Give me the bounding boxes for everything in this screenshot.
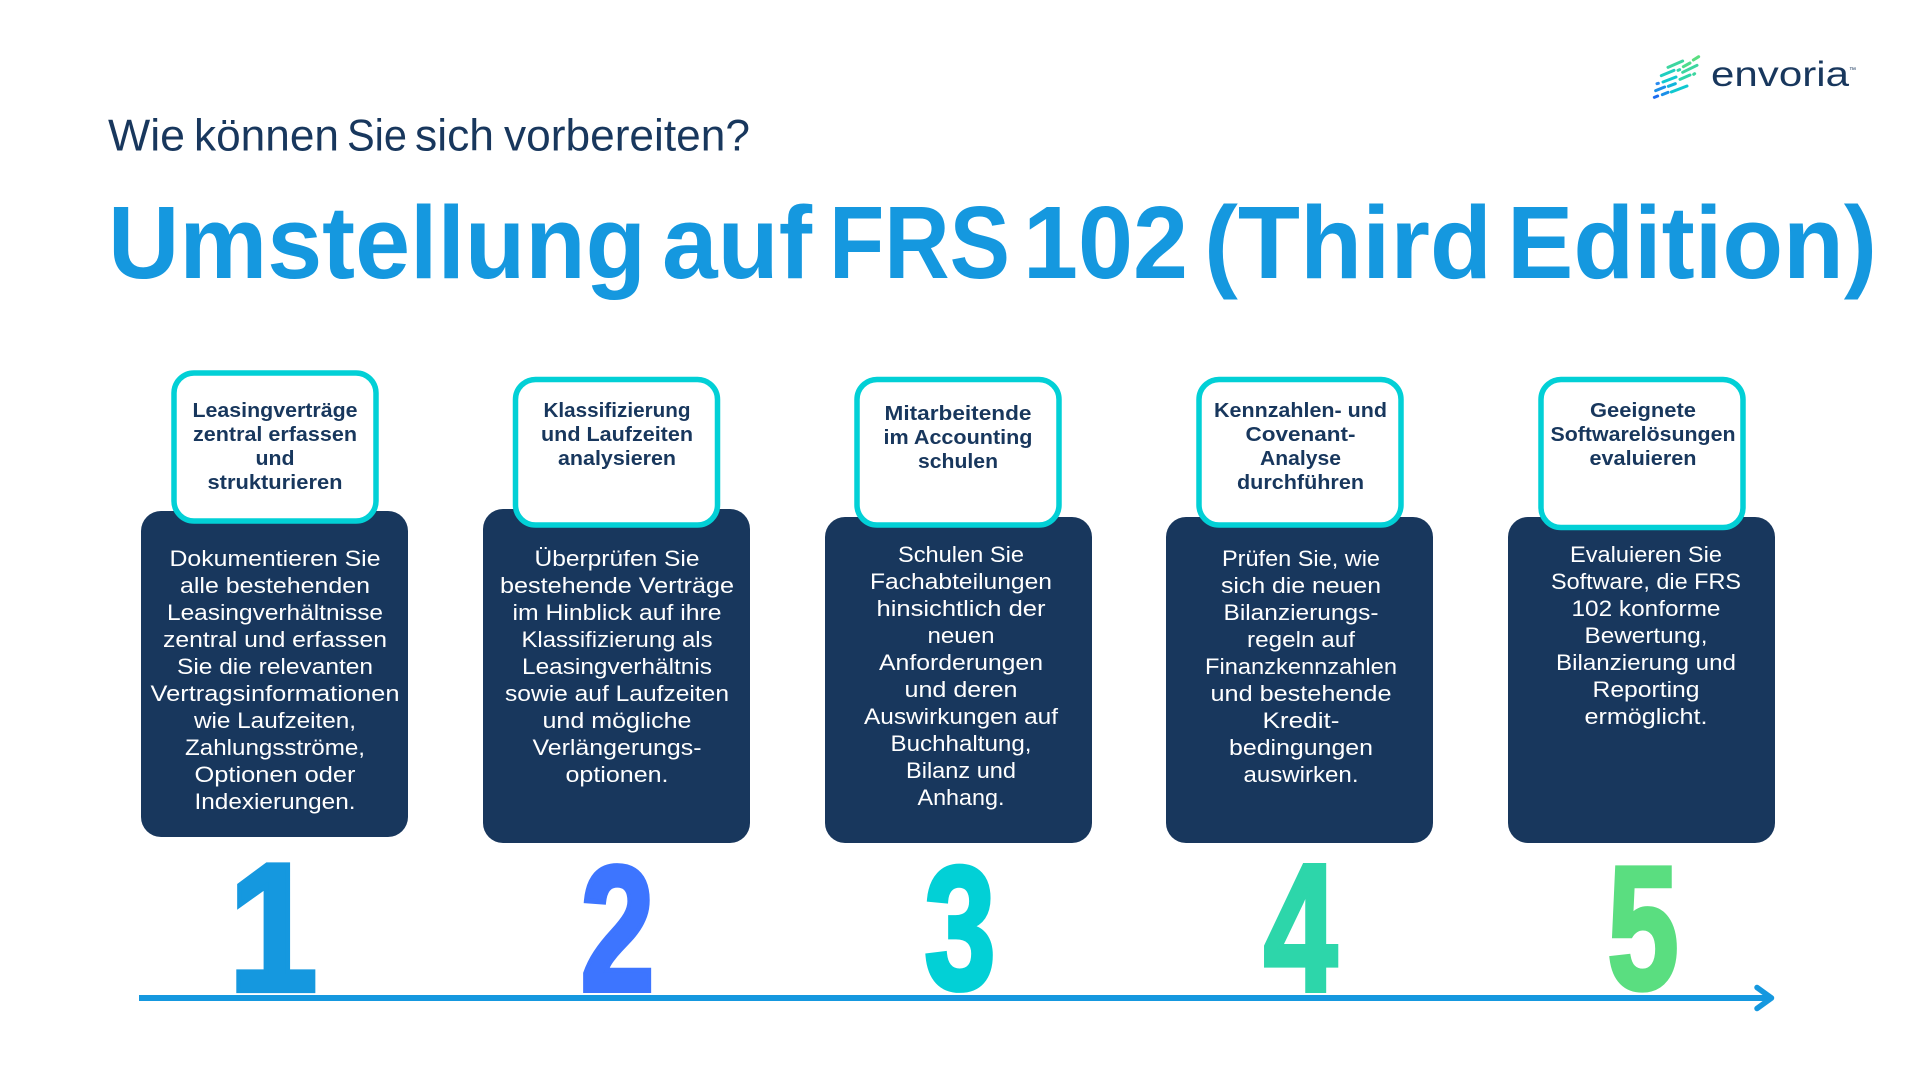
subtitle: sich [415,112,494,160]
title: (Third [1204,185,1492,300]
logo: envoria [1654,55,1856,97]
body text: Bewertung, [1584,623,1708,648]
title: Umstellung [108,185,646,300]
wordmark: envoria [1711,55,1850,94]
body text: Auswirkungen auf [864,704,1059,729]
body text: ermöglicht. [1584,704,1708,729]
heading: evaluieren [1590,448,1696,470]
body text: Bilanz und [906,758,1016,783]
body text [864,542,1059,810]
body text: sowie auf Laufzeiten [505,681,729,706]
body text: neuen [928,623,994,648]
body text: Indexierungen. [194,789,356,814]
body text: Dokumentieren Sie [170,546,380,571]
card heading box [857,380,1059,525]
subtitle [108,112,750,160]
subtitle: können [194,112,339,160]
body text: hinsichtlich der [876,596,1046,621]
body text: Prüfen Sie, wie [1222,546,1380,571]
body text: Buchhaltung, [890,731,1032,756]
heading: und Laufzeiten [541,424,693,446]
heading: Leasingverträge [192,400,358,422]
arrow: timeline [139,988,1772,1008]
number 3: 3 [924,830,996,1026]
body text: Kredit- [1262,708,1340,733]
body text [1205,546,1397,787]
body text: regeln auf [1247,627,1356,652]
heading: schulen [918,451,998,473]
body text: Schulen Sie [898,542,1024,567]
subtitle: Wie [108,112,185,160]
title: 102 [1023,185,1188,300]
heading: Mitarbeitende [884,403,1032,425]
body text: Anforderungen [879,650,1043,675]
heading: im Accounting [884,427,1032,449]
body text: Leasingverhältnisse [167,600,383,625]
heading: durchführen [1237,472,1364,494]
heading: analysieren [558,448,676,470]
panel: step 1 [141,373,408,837]
icon: envoria dashes [1654,57,1699,97]
body text: Vertragsinformationen [150,681,400,706]
body text: Verlängerungs- [532,735,702,760]
panel: step 4 [1166,380,1433,843]
heading: strukturieren [208,472,342,494]
heading: Covenant- [1246,424,1356,446]
subtitle: Sie [347,112,407,160]
subtitle: vorbereiten? [504,112,750,160]
card body [141,511,408,837]
title: FRS [829,185,1010,300]
body text: Reporting [1592,677,1700,702]
body text: Optionen oder [194,762,356,787]
card heading box [1199,380,1401,525]
heading: Geeignete [1590,400,1696,422]
body text: zentral und erfassen [163,627,387,652]
title [108,185,1877,300]
body text: bestehende Verträge [500,573,734,598]
body text: wie Laufzeiten, [193,708,356,733]
title: auf [662,185,813,300]
body text: sich die neuen [1221,573,1381,598]
body text: Evaluieren Sie [1570,542,1722,567]
panel: step 2 [483,380,750,843]
body text: 102 konforme [1572,596,1720,621]
number 5: 5 [1607,830,1679,1026]
heading [1550,400,1736,470]
body text: Zahlungsströme, [185,735,365,760]
body text: Sie die relevanten [177,654,373,679]
body text: und deren [904,677,1018,702]
card heading box [516,380,718,525]
body text: optionen. [566,762,668,787]
heading: zentral erfassen [193,424,357,446]
body text [150,546,400,814]
body text: bedingungen [1229,735,1373,760]
card heading box [1541,380,1743,528]
heading [541,400,693,470]
body text: auswirken. [1244,762,1358,787]
body text [1551,542,1741,729]
body text: Klassifizierung als [522,627,712,652]
body text: Bilanzierungs- [1224,600,1378,625]
heading [192,400,358,494]
card body [1166,517,1433,843]
heading: Softwarelösungen [1550,424,1736,446]
heading [1214,400,1387,494]
body text: Leasingverhältnis [522,654,712,679]
card body [1508,517,1775,843]
card heading box [174,373,376,521]
body text: und mögliche [542,708,692,733]
heading [884,403,1032,473]
heading: Kennzahlen- und [1214,400,1387,422]
body text: Überprüfen Sie [534,546,700,571]
number 2: 2 [580,830,655,1029]
number 4: 4 [1264,826,1337,1029]
number 1: 1 [228,827,318,1030]
body text: alle bestehenden [180,573,370,598]
trademark: ™ [1849,67,1856,74]
heading: und [256,448,294,470]
body text: Finanzkennzahlen [1205,654,1397,679]
card body [483,509,750,843]
body text: Fachabteilungen [870,569,1052,594]
title: Edition) [1507,185,1877,300]
body text: Anhang. [918,785,1004,810]
panel: step 5 [1508,380,1775,843]
heading: Klassifizierung [544,400,690,422]
body text: und bestehende [1210,681,1392,706]
body text: Bilanzierung und [1556,650,1736,675]
body text: Software, die FRS [1551,569,1741,594]
card body [825,517,1092,843]
body text: im Hinblick auf ihre [512,600,722,625]
heading: Analyse [1260,448,1341,470]
body text [500,546,734,787]
panel: step 3 [825,380,1092,843]
